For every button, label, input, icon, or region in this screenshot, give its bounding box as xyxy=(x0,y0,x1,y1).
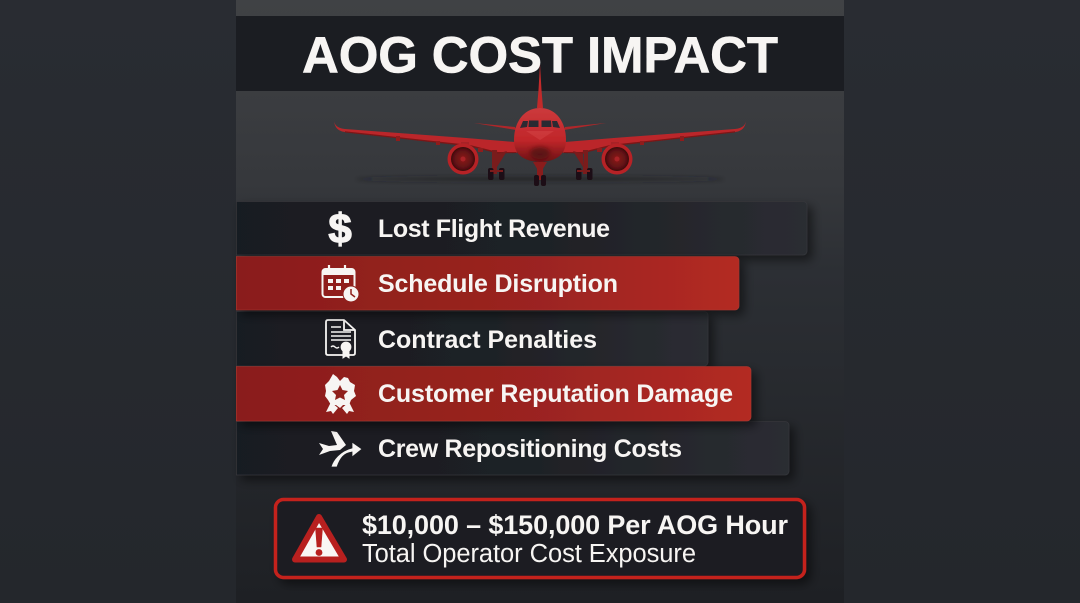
nose shading xyxy=(530,147,550,159)
icon: contract document xyxy=(326,320,355,358)
left landing gear xyxy=(488,150,507,180)
label: Lost Flight Revenue xyxy=(378,215,610,243)
bar: lost flight revenue xyxy=(236,202,807,255)
callout amount: $10,000 – $150,000 Per AOG Hour xyxy=(362,510,788,540)
tail fin xyxy=(537,64,543,108)
icon: dollar sign: $ xyxy=(328,205,352,252)
bar: schedule disruption xyxy=(236,256,739,310)
left engine xyxy=(448,142,478,174)
left wing xyxy=(334,121,517,153)
title: AOG COST IMPACT xyxy=(302,26,778,84)
bar: crew repositioning costs xyxy=(236,422,789,475)
fuselage xyxy=(514,108,566,162)
center panel xyxy=(236,0,844,603)
title band xyxy=(236,16,844,91)
callout caption: Total Operator Cost Exposure xyxy=(362,540,696,568)
nose gear xyxy=(533,160,547,186)
label: Contract Penalties xyxy=(378,326,597,354)
icon: plane with arrow xyxy=(319,431,362,467)
callout: total cost exposure xyxy=(276,500,804,578)
icon: warning triangle xyxy=(295,517,344,560)
bar: customer reputation damage xyxy=(236,366,751,421)
icon: calendar with clock xyxy=(322,265,359,302)
nose highlight xyxy=(526,131,554,140)
bar: contract penalties xyxy=(236,312,708,366)
cockpit windows xyxy=(520,120,560,128)
wing flap fairings xyxy=(396,136,684,152)
right wing xyxy=(563,121,746,153)
right engine xyxy=(602,142,632,174)
right landing gear xyxy=(573,150,592,180)
ground shadow xyxy=(355,177,725,181)
airplane illustration xyxy=(334,64,746,186)
label: Customer Reputation Damage xyxy=(378,380,733,408)
label: Schedule Disruption xyxy=(378,270,618,298)
label: Crew Repositioning Costs xyxy=(378,435,682,463)
wing underside shading xyxy=(345,131,735,154)
tailplanes xyxy=(474,123,606,130)
icon: damaged award badge xyxy=(325,374,356,414)
